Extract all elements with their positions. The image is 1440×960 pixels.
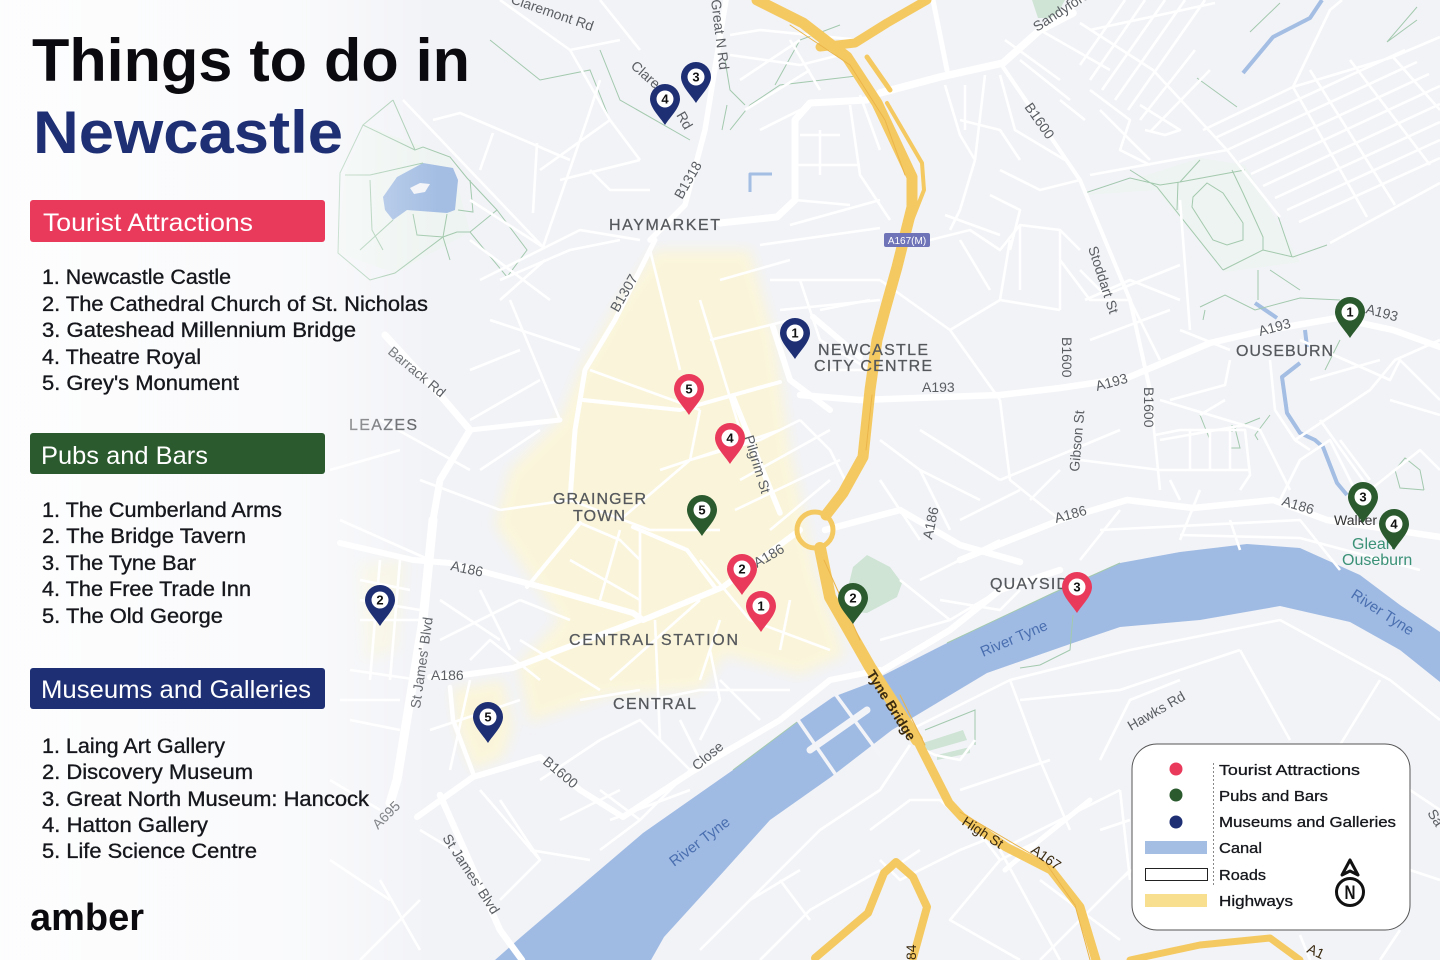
panel: tourist attractions: 3. Gateshead Millennium Bridge	[42, 319, 356, 342]
map labels: 84	[903, 944, 919, 960]
map labels: A695	[369, 798, 403, 832]
map labels: A193	[1094, 370, 1130, 394]
pins: museums and galleries: 3	[692, 70, 700, 84]
map labels	[349, 0, 1440, 960]
panel: museums and galleries: Museums and Galleries	[41, 676, 311, 704]
pins: museums and galleries: 4	[661, 92, 669, 106]
pins: pubs and bars: 3	[1359, 490, 1367, 504]
map labels: Stoddart St	[1085, 244, 1122, 316]
pins: tourist attractions: 2	[738, 562, 746, 576]
panel: pubs and bars: 1. The Cumberland Arms	[42, 499, 282, 522]
map labels: A186	[431, 667, 464, 683]
map labels: Walker	[1334, 512, 1377, 528]
title	[32, 27, 470, 166]
map labels: River Tyne	[666, 814, 733, 870]
panel: museums and galleries: 2. Discovery Museum	[42, 761, 253, 784]
map labels: A193	[922, 379, 955, 395]
map labels: St James' Blvd	[407, 616, 436, 709]
panel: museums and galleries: 1. Laing Art Gallery	[42, 735, 226, 758]
map labels: B1307	[607, 271, 641, 314]
pins: tourist attractions: 1	[757, 598, 765, 614]
green paths	[338, 3, 1424, 770]
map labels: Pilgrim St	[741, 433, 774, 495]
map labels: Great N Rd	[708, 0, 733, 71]
river tyne	[495, 544, 1440, 960]
major roads	[340, 0, 1440, 960]
map labels: A193	[1364, 300, 1400, 324]
bridges	[798, 695, 880, 778]
pins: pubs and bars	[687, 297, 1409, 624]
map labels: QUAYSIDE	[990, 576, 1080, 593]
map labels: A186	[1280, 493, 1316, 517]
map labels: CENTRAL STATION	[569, 632, 738, 649]
legend: Tourist Attractions	[1219, 762, 1360, 779]
map labels: River Tyne	[1348, 586, 1417, 639]
map labels: Tyne Bridge	[863, 667, 919, 743]
panel: pubs and bars: 5. The Old George	[42, 605, 223, 628]
panel: tourist attractions: 2. The Cathedral Church of St. Nicholas	[42, 293, 428, 316]
panel: museums and galleries: 3. Great North Museum: Hancock	[42, 788, 370, 811]
pins: tourist attractions	[674, 374, 1092, 632]
title: Newcastle	[33, 99, 343, 166]
icon: north arrow: N	[1344, 883, 1356, 904]
panel: pubs and bars	[30, 433, 325, 628]
map labels: TOWN	[573, 508, 625, 525]
map labels: B1600	[1141, 387, 1157, 428]
pins: pubs and bars: 5	[698, 502, 706, 518]
map labels: OUSEBURN	[1236, 343, 1333, 360]
minor streets	[330, 0, 1440, 960]
map labels: Rd	[673, 108, 696, 132]
panel: museums and galleries	[30, 668, 370, 863]
map labels: A186	[1053, 502, 1089, 526]
panel: museums and galleries: 4. Hatton Gallery	[42, 814, 209, 837]
map labels: River Tyne	[978, 617, 1050, 661]
title: Things to do in	[32, 27, 470, 94]
map labels: Close	[689, 738, 727, 773]
legend: Museums and Galleries	[1219, 814, 1396, 831]
legend	[1132, 744, 1410, 930]
map labels: A186	[750, 540, 787, 571]
lake	[383, 163, 458, 220]
map labels: A186	[449, 557, 485, 580]
legend: Canal	[1219, 840, 1262, 857]
map labels: Gibson St	[1066, 410, 1087, 472]
panel: tourist attractions	[30, 200, 428, 395]
map labels: Ouseburn	[1342, 552, 1412, 569]
road badge: A167(M)	[888, 236, 926, 247]
logo: amber: amber	[30, 897, 144, 939]
panel: museums and galleries: 5. Life Science Centre	[42, 840, 257, 863]
panel: tourist attractions: 4. Theatre Royal	[42, 346, 201, 369]
map labels: HAYMARKET	[609, 217, 720, 234]
panel: pubs and bars: 3. The Tyne Bar	[42, 552, 196, 575]
panel: tourist attractions: Tourist Attractions	[43, 209, 253, 237]
parks	[338, 0, 1300, 760]
map labels: CITY CENTRE	[814, 358, 932, 375]
panel: pubs and bars: Pubs and Bars	[41, 442, 208, 470]
pins: tourist attractions: 5	[685, 382, 693, 396]
map labels: High St	[959, 813, 1007, 852]
map labels: A186	[919, 505, 942, 541]
map labels: Glean	[1352, 536, 1395, 553]
pins: pubs and bars: 4	[1390, 516, 1398, 532]
legend: Highways	[1219, 893, 1293, 910]
map labels: B1600	[1022, 100, 1058, 142]
pins: pubs and bars: 1	[1346, 304, 1354, 320]
map labels: B1318	[671, 158, 705, 202]
pins: museums and galleries: 2	[376, 592, 384, 608]
map labels: B1600	[540, 753, 582, 791]
map labels: A167	[1028, 841, 1064, 873]
map labels: Barrack Rd	[385, 343, 449, 400]
map labels: GRAINGER	[553, 491, 646, 508]
map labels: B1600	[1059, 337, 1075, 378]
legend: Pubs and Bars	[1219, 788, 1328, 805]
map labels: CENTRAL	[613, 696, 696, 713]
panel: pubs and bars: 4. The Free Trade Inn	[42, 578, 251, 601]
highways	[757, 0, 1300, 960]
lake island	[410, 183, 430, 194]
pins: museums and galleries: 1	[791, 326, 799, 340]
canal streams	[750, 0, 1347, 495]
icon: north arrow	[1336, 860, 1364, 906]
pins: museums and galleries	[365, 62, 810, 743]
map labels: LEAZES	[349, 417, 417, 434]
map labels: Hawks Rd	[1124, 688, 1188, 734]
legend: Roads	[1219, 867, 1266, 884]
pins: tourist attractions: 3	[1073, 580, 1081, 594]
city centre shaded area	[360, 250, 845, 770]
pins: museums and galleries: 5	[484, 710, 492, 724]
road badge	[884, 233, 930, 247]
map labels: A193	[1257, 315, 1293, 339]
pins: pubs and bars: 2	[849, 590, 857, 606]
panel: tourist attractions: 1. Newcastle Castle	[42, 266, 231, 289]
map labels: NEWCASTLE	[818, 342, 928, 359]
panel: tourist attractions: 5. Grey's Monument	[42, 372, 239, 395]
sidebar fade	[0, 0, 440, 960]
pins: tourist attractions: 4	[726, 430, 734, 446]
map labels: Clare	[628, 57, 664, 92]
panel: pubs and bars: 2. The Bridge Tavern	[42, 525, 246, 548]
map labels: St James' Blvd	[439, 831, 503, 917]
